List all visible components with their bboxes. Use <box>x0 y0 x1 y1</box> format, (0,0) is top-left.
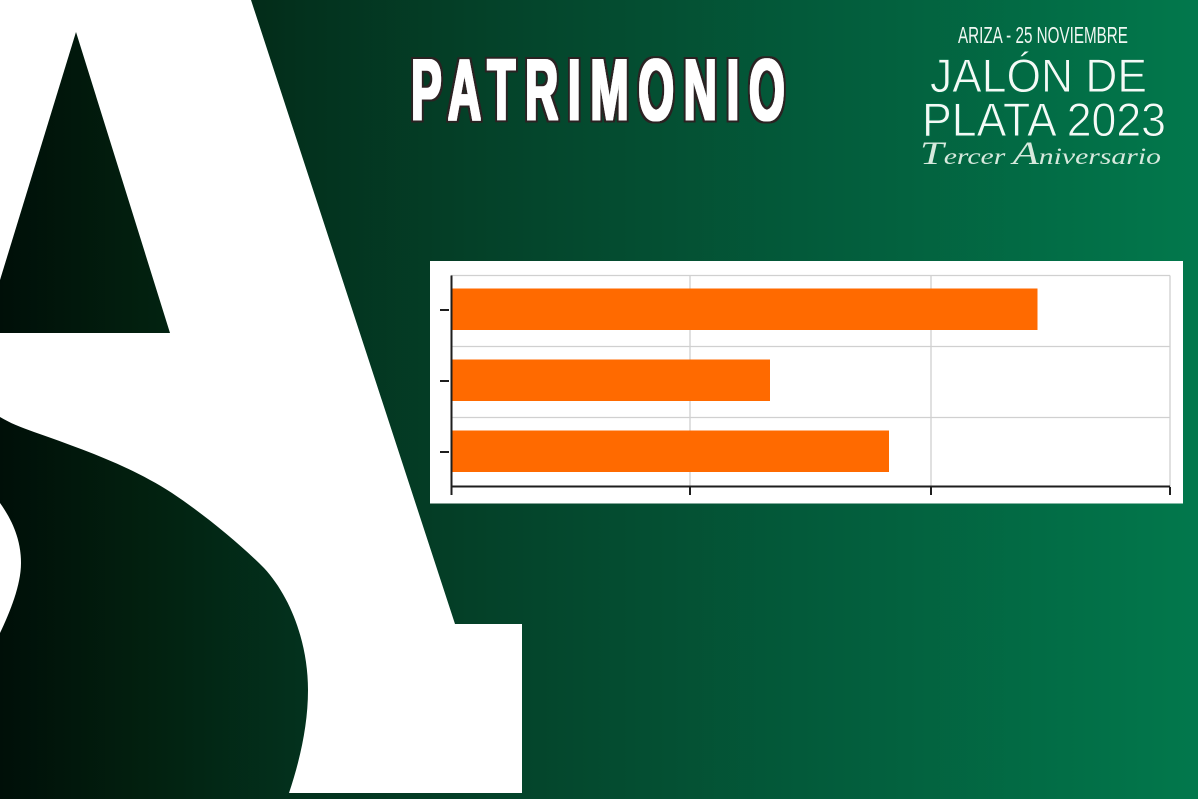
panel: bar chart <box>430 261 1183 504</box>
bar 3 <box>452 430 889 472</box>
event logo <box>920 22 1166 172</box>
event name line 2: PLATA 2023 <box>922 93 1166 146</box>
bar 2 <box>452 360 770 401</box>
bar 1 <box>452 288 1038 330</box>
logo lower white curve <box>0 503 21 633</box>
title: PATRIMONIO <box>411 42 794 138</box>
axes and ticks <box>440 276 1170 495</box>
event date: ARIZA - 25 NOVIEMBRE <box>958 22 1128 49</box>
large white logo shape <box>0 0 522 793</box>
grid lines <box>451 276 1170 487</box>
event name line 1: JALÓN DE <box>930 49 1147 102</box>
logo inner triangle cutout <box>0 32 170 333</box>
anniversary script: Tercer A niversario <box>920 136 1161 172</box>
